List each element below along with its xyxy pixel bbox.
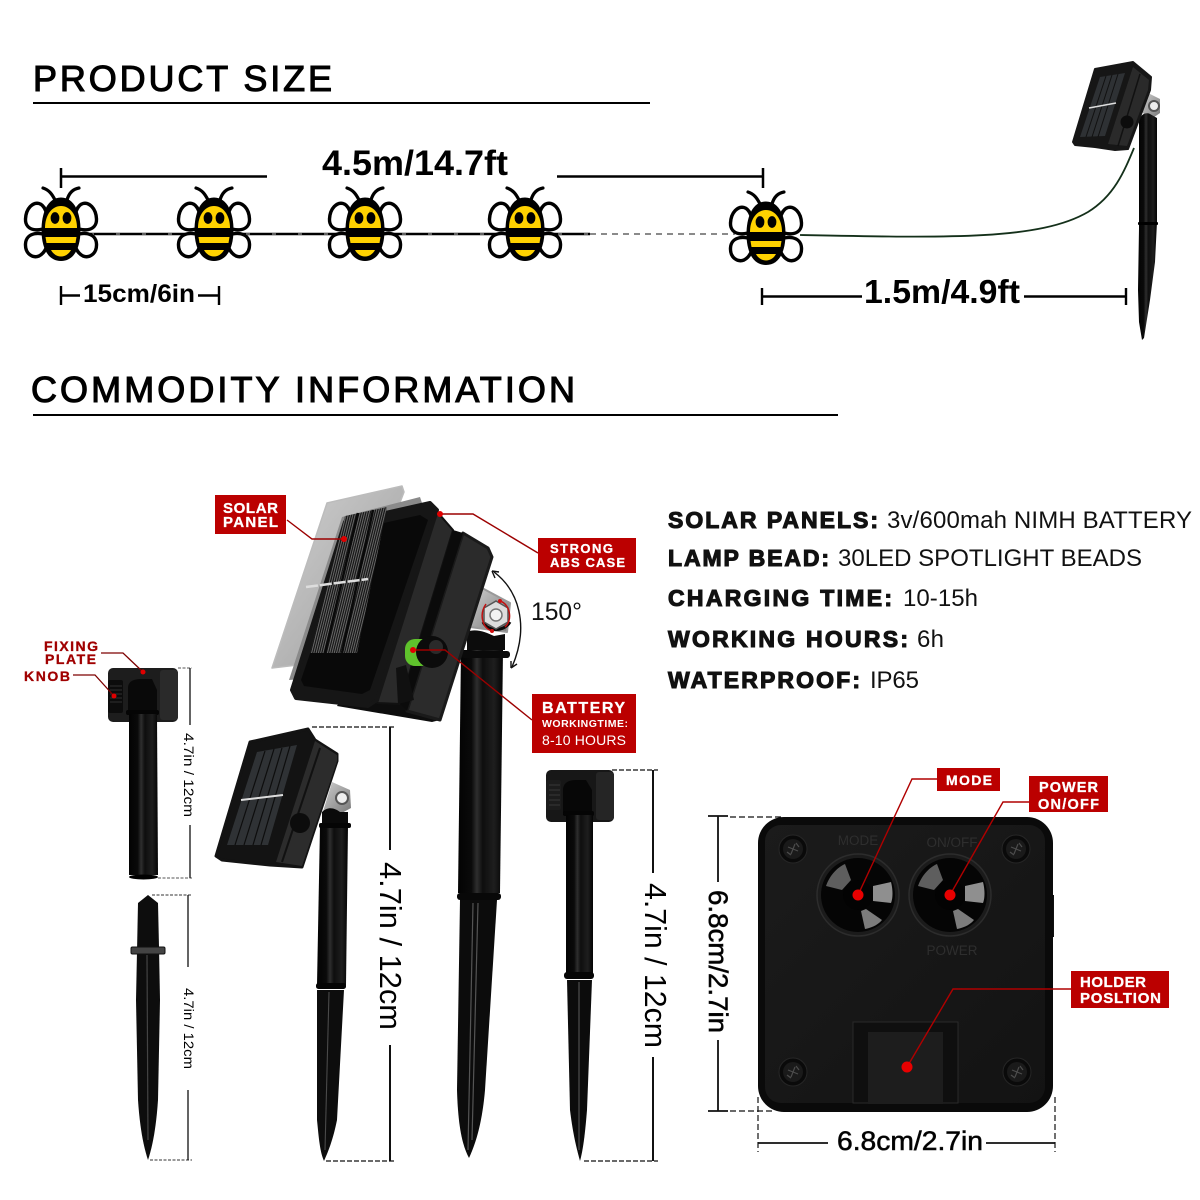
callout: fixing plate: PLATE <box>45 651 96 667</box>
specifications text: 3v/600mah NIMH BATTERY <box>887 507 1192 534</box>
callout: battery: 8-10 HOURS <box>542 732 626 748</box>
specifications text: SOLAR PANELS: <box>668 507 878 533</box>
product: back of solar box: ON/OFF <box>926 835 978 850</box>
product: assembled solar panel, side view <box>216 729 351 1161</box>
product: ground spike <box>131 895 165 1160</box>
dimension: total length 4.5m/14.7ft: 4.5m/14.7ft <box>322 144 508 183</box>
specifications text: LAMP BEAD: <box>668 545 829 571</box>
dimension: assembled height 4.7in / 12cm <box>312 727 408 1161</box>
specifications text: WATERPROOF: <box>668 667 860 693</box>
dimension: box height 6.8cm/2.7in <box>703 816 782 1111</box>
dimension: box width 6.8cm/2.7in <box>758 1097 1055 1156</box>
lead wire to solar panel <box>800 148 1134 237</box>
heading: product size: PRODUCT SIZE <box>33 58 332 99</box>
dimension: upper stake 4.7in / 12cm <box>158 668 197 878</box>
callout: mode <box>852 768 1000 900</box>
callout: fixing plate: FIXING <box>44 638 98 654</box>
dimension: total length 4.5m/14.7ft <box>61 144 763 188</box>
callout: holder position <box>902 971 1169 1072</box>
dimension: lead 1.5m/4.9ft: 1.5m/4.9ft <box>864 273 1020 310</box>
callout: power on/off: POWER <box>1039 780 1099 796</box>
callout: battery: WORKINGTIME: <box>542 718 628 730</box>
callout: knob: KNOB <box>24 668 70 684</box>
specifications text: 10-15h <box>903 585 978 612</box>
product: solar panel with stake, top right <box>1073 62 1160 340</box>
callout: strong ABS case: STRONG <box>550 541 613 556</box>
callout: fixing plate <box>44 638 146 674</box>
dimension: box width 6.8cm/2.7in: 6.8cm/2.7in <box>837 1126 983 1156</box>
callout: solar panel: SOLAR <box>223 500 278 517</box>
rotation arrow 150 degrees: 150° <box>531 598 582 626</box>
specifications text: CHARGING TIME: <box>668 585 892 611</box>
product: back of solar box <box>758 817 1054 1112</box>
callout: power on/off: ON/OFF <box>1038 797 1099 813</box>
product: exploded solar panel with stake <box>272 486 510 1158</box>
product: back of solar box: POWER <box>926 943 978 958</box>
callout: solar panel: PANEL <box>223 514 278 531</box>
dimension: lead 1.5m/4.9ft <box>762 273 1126 310</box>
specifications text: 30LED SPOTLIGHT BEADS <box>838 545 1142 572</box>
callout: battery <box>410 647 636 753</box>
product: stake with fixing plate <box>546 770 614 1161</box>
callout: power on/off <box>944 776 1108 900</box>
callout: strong ABS case: ABS CASE <box>550 555 625 570</box>
string light wire <box>90 233 735 235</box>
specifications text <box>668 507 1192 694</box>
dimension: box height 6.8cm/2.7in: 6.8cm/2.7in <box>703 890 733 1033</box>
dimension: ground spike 4.7in / 12cm <box>150 895 197 1160</box>
callout: solar panel <box>215 495 347 542</box>
heading: commodity information: COMMODITY INFORMATION <box>31 369 575 410</box>
specifications text: IP65 <box>870 667 919 694</box>
dimension: spacing 15cm/6in <box>61 280 219 308</box>
bee lights <box>25 188 802 265</box>
callout: knob <box>24 668 116 698</box>
dimension: spacing 15cm/6in: 15cm/6in <box>83 280 195 308</box>
dimension: stake height 4.7in / 12cm <box>584 770 673 1161</box>
callout: battery: BATTERY <box>542 700 625 717</box>
rotation arrow 150 degrees <box>492 571 582 668</box>
callout: holder position: POSLTION <box>1080 990 1161 1007</box>
specifications text: WORKING HOURS: <box>668 626 908 652</box>
dimension: assembled height 4.7in / 12cm: 4.7in / 12cm <box>373 862 408 1030</box>
callout: strong ABS case <box>437 511 636 573</box>
dimension: stake height 4.7in / 12cm: 4.7in / 12cm <box>638 883 673 1048</box>
dimension: ground spike 4.7in / 12cm: 4.7in / 12cm <box>181 988 197 1069</box>
product: stake upper part with fixing plate <box>108 668 178 880</box>
callout: mode: MODE <box>946 772 992 788</box>
callout: holder position: HOLDER <box>1080 974 1146 991</box>
specifications text: 6h <box>917 626 944 653</box>
product: back of solar box: MODE <box>838 833 878 848</box>
dimension: upper stake 4.7in / 12cm: 4.7in / 12cm <box>181 733 197 817</box>
